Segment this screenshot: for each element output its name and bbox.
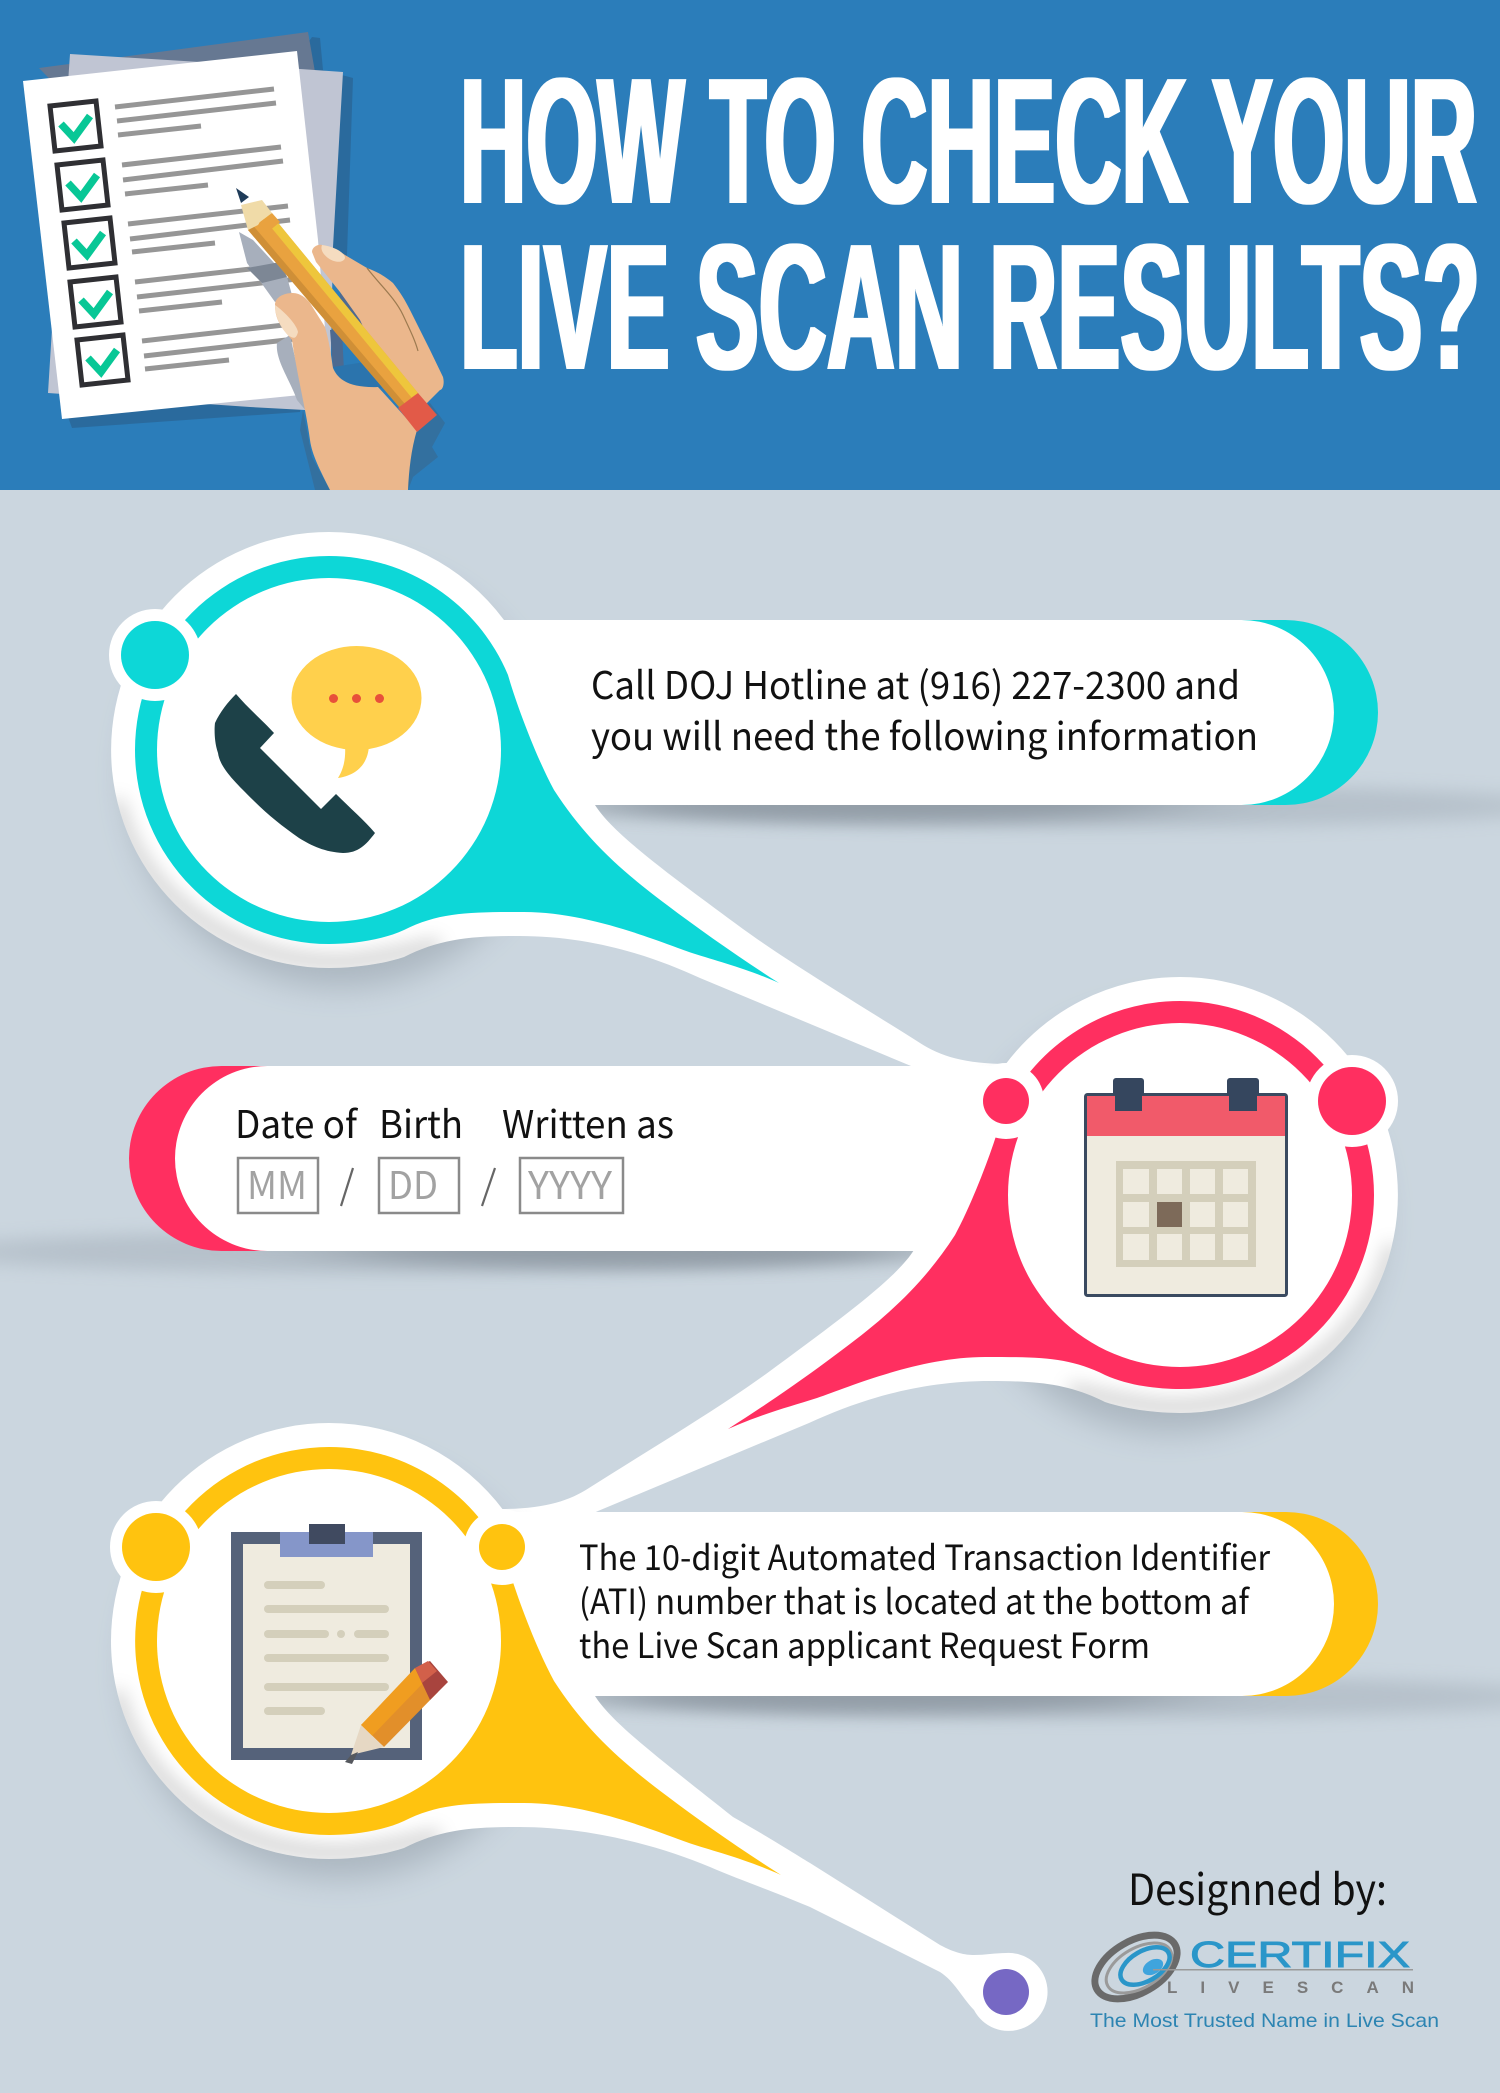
shading on white edge (1069, 1245, 1393, 1407)
white blob with tail (501, 977, 1398, 1555)
logo: Certifix Live Scan: CERTIFIX (1190, 1934, 1410, 1975)
white disc (157, 578, 501, 922)
teal ring and tail (135, 556, 779, 983)
end dot (983, 1969, 1029, 2015)
bar end cap (1130, 1512, 1378, 1696)
icon: calendar (1086, 1078, 1286, 1296)
title (460, 41, 1480, 408)
blob shadow (128, 1454, 552, 1878)
text: step 3: (ATI) number that is located at the bottom af (579, 1574, 1251, 1624)
text: step 1: Call DOJ Hotline at (916) 227-2300 and (591, 655, 1240, 710)
date format boxes: MM (247, 1155, 307, 1210)
designed by credit: Designned by: (1128, 1856, 1387, 1918)
text: step 3: The 10-digit Automated Transaction Identifier (579, 1530, 1271, 1580)
blob shadow (957, 1008, 1381, 1432)
date format boxes: YYYY (527, 1155, 613, 1210)
white blob with tail (111, 532, 1008, 1110)
white text bar (175, 1066, 1020, 1251)
shading on white edge (116, 1691, 440, 1853)
white text bar (490, 1512, 1334, 1696)
bar end cap (129, 1066, 377, 1251)
logo: Certifix Live Scan: The Most Trusted Name in Live Scan (1090, 2010, 1439, 2032)
marker dots (1306, 1055, 1398, 1147)
white blob with tail to end dot (111, 1423, 1048, 2031)
marker dots (110, 1501, 202, 1593)
text: date of birth: Date of (235, 1094, 359, 1149)
date format boxes (238, 1155, 623, 1213)
header band (0, 0, 1500, 490)
white text bar (490, 620, 1334, 805)
text: date of birth: Written as (502, 1094, 674, 1149)
date format boxes: DD (388, 1155, 438, 1210)
pencil and thumb shadow on paper (239, 232, 292, 302)
blob shadow (128, 563, 552, 987)
text: date of birth (235, 1094, 674, 1149)
text: date of birth: Birth (379, 1094, 463, 1149)
bar end cap (1130, 620, 1378, 805)
pencil (248, 213, 418, 408)
text: step 3 (579, 1530, 1271, 1668)
icon: clipboard and pencil (231, 1524, 448, 1764)
panel: step 2 date of birth (129, 977, 1398, 1555)
text: step 3: the Live Scan applicant Request Form (579, 1618, 1150, 1668)
panel: step 3 ATI number (110, 1423, 1378, 2031)
white disc (1008, 1023, 1352, 1367)
logo: Certifix Live Scan: LIVESCAN (1167, 1978, 1414, 1997)
pink ring and tail (728, 1001, 1374, 1429)
panel: step 1 call DOJ hotline (109, 532, 1378, 1110)
white disc (157, 1469, 501, 1813)
text: step 1: you will need the following information (591, 706, 1258, 761)
logo: Certifix Live Scan (1084, 1922, 1439, 2032)
shading on white edge (116, 800, 440, 962)
icon: phone and speech bubble (215, 646, 422, 853)
marker dot (109, 609, 201, 701)
illustration: checklist with hand and pencil (23, 32, 445, 490)
text: step 1 (591, 655, 1258, 761)
hand (275, 293, 417, 490)
shadows under bars (0, 784, 1500, 1719)
hand cast shadow (300, 403, 445, 490)
gap between fingers (330, 293, 378, 390)
yellow ring and tail (135, 1447, 781, 1875)
